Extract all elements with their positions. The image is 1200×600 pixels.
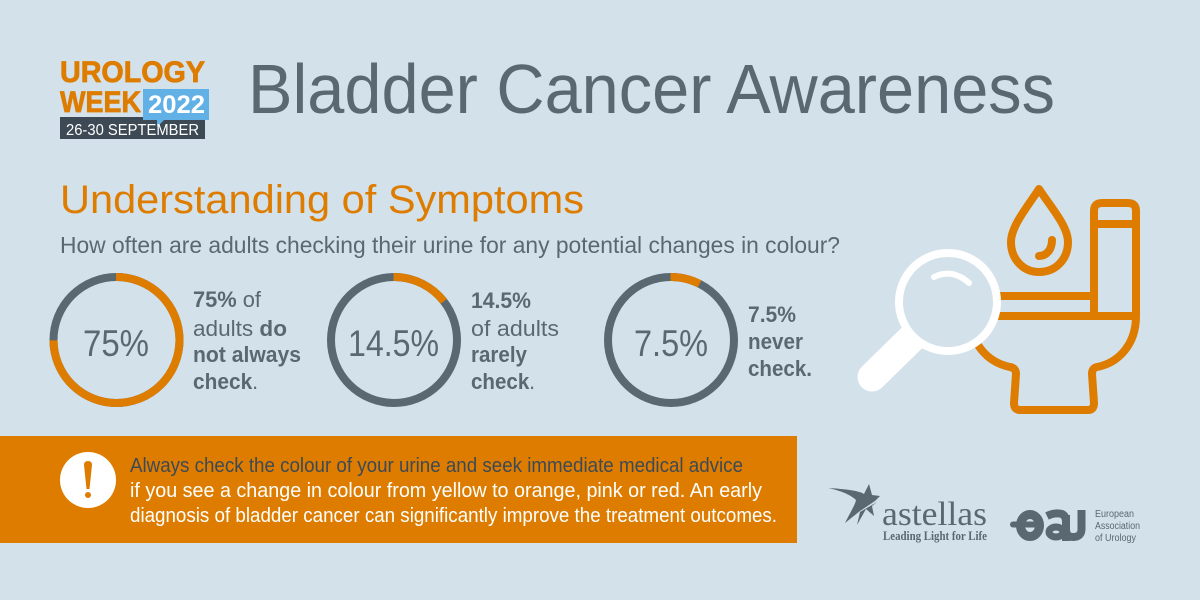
logo: Urology Week 2022: WEEK xyxy=(60,86,141,119)
text: 14.5% of adults rarely check: 14.5% xyxy=(471,288,531,313)
text: 7.5% never check: check. xyxy=(748,356,812,381)
text: 75% of adults do not always check: not always xyxy=(193,342,301,367)
callout text: if you see a change in colour from yellow to orange, pink or red. An early xyxy=(130,480,762,502)
logo: Urology Week 2022: 2022 xyxy=(148,91,205,119)
donut chart: 75%: 75% xyxy=(83,323,149,364)
text: 14.5% of adults rarely check: rarely xyxy=(471,342,528,367)
callout banner xyxy=(0,436,797,543)
logo: European Association of Urology: Association xyxy=(1095,521,1140,532)
text: 14.5% of adults rarely check xyxy=(471,288,559,394)
logo: European Association of Urology: European xyxy=(1095,509,1134,520)
text: 75% of adults do not always check xyxy=(193,287,301,394)
text: 75% of adults do not always check: 75% of xyxy=(193,287,262,312)
icon: water drop xyxy=(1011,189,1068,272)
icon: exclamation mark xyxy=(60,452,116,508)
logo: Urology Week 2022 xyxy=(60,56,209,139)
logo: European Association of Urology xyxy=(1013,509,1140,544)
text: 14.5% of adults rarely check: of adults xyxy=(471,316,559,341)
callout text: diagnosis of bladder cancer can significantly improve the treatment outcomes. xyxy=(130,505,777,527)
question text: How often are adults checking their urine for any potential changes in colour? xyxy=(60,232,840,258)
logo: astellas xyxy=(828,484,987,543)
donut chart: 75% xyxy=(54,277,180,403)
donut chart: 7.5% xyxy=(608,277,734,403)
logo: astellas: Leading Light for Life xyxy=(883,528,987,543)
icon: magnifying glass xyxy=(872,253,997,377)
text: 75% of adults do not always check: adults do xyxy=(193,316,287,341)
donut chart: 14.5%: 14.5% xyxy=(348,323,439,364)
heading: Understanding of Symptoms: Understanding of Symptoms xyxy=(60,178,584,222)
text: 14.5% of adults rarely check: check. xyxy=(471,369,535,394)
icon: toilet xyxy=(978,203,1136,410)
donut chart: 7.5%: 7.5% xyxy=(634,323,708,364)
title: Bladder Cancer Awareness xyxy=(248,50,1055,128)
donut chart: 14.5% xyxy=(331,277,457,403)
text: 7.5% never check xyxy=(748,302,812,381)
text: 7.5% never check: 7.5% xyxy=(748,302,796,327)
logo: Urology Week 2022: UROLOGY xyxy=(60,56,205,89)
text: 75% of adults do not always check: check. xyxy=(193,369,258,394)
text: 7.5% never check: never xyxy=(748,329,803,354)
callout text: Always check the colour of your urine and seek immediate medical advice xyxy=(130,455,743,477)
logo: European Association of Urology: of Urology xyxy=(1095,533,1136,544)
logo: Urology Week 2022: 26-30 SEPTEMBER xyxy=(66,122,199,139)
logo: astellas: astellas xyxy=(882,496,987,533)
callout text xyxy=(130,455,777,527)
